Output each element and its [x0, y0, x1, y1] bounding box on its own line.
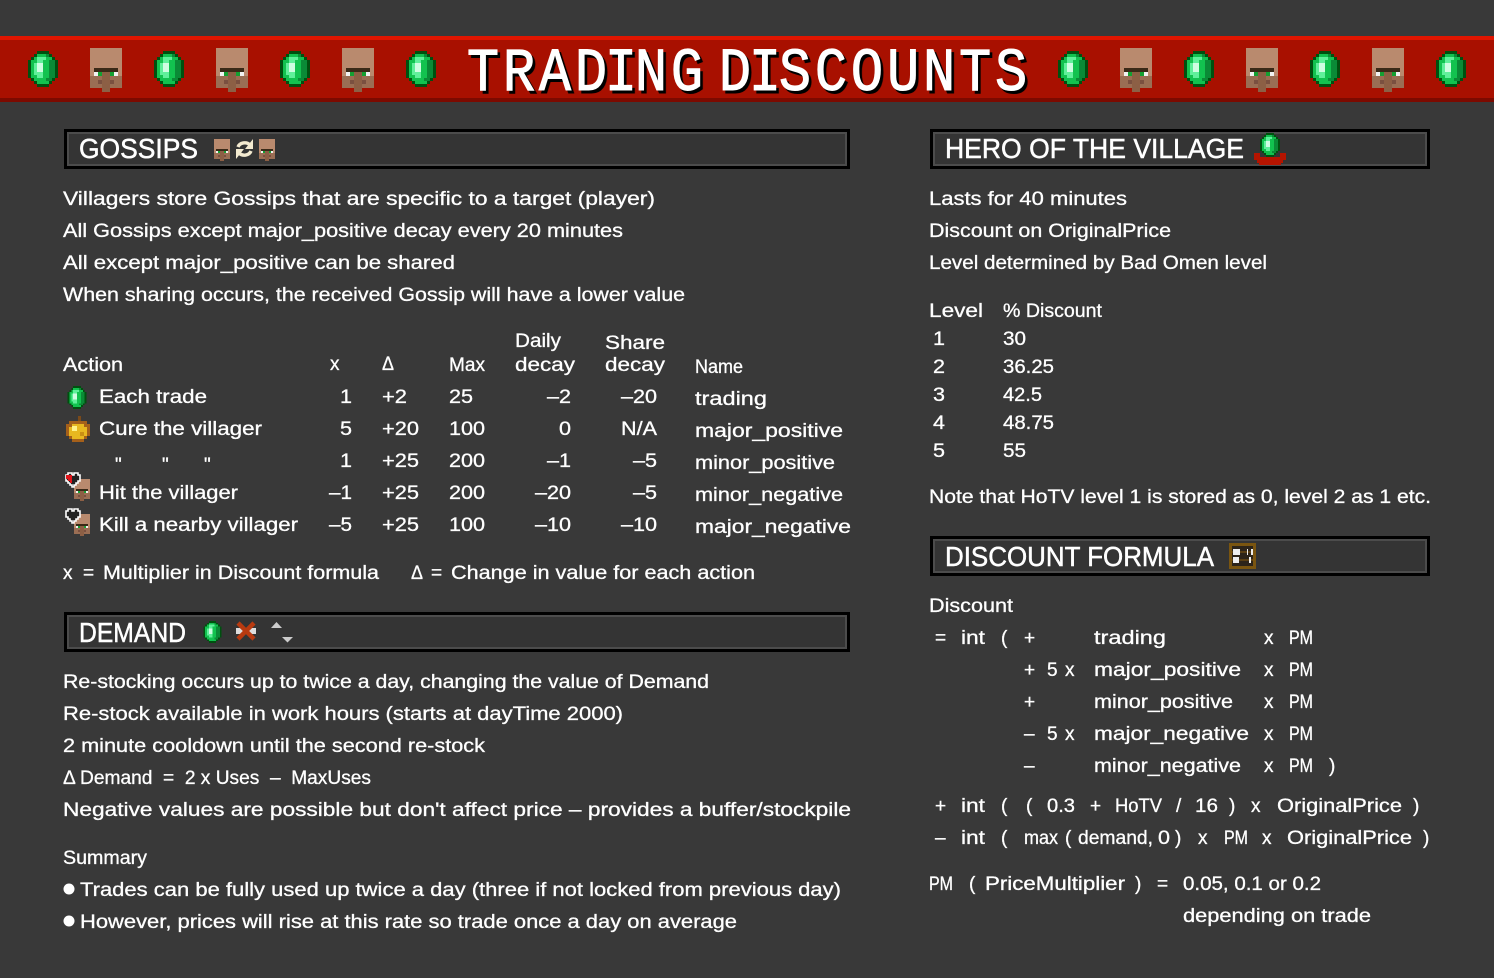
formula line 2: PM: [1289, 660, 1313, 681]
icon: emerald row left: [28, 51, 436, 87]
panel: hero of the village: [929, 129, 1431, 508]
panel: gossips: [63, 129, 851, 584]
icon: emerald row right: [1058, 51, 1466, 87]
formula line 7: PM: [1224, 828, 1248, 849]
formula line 7: –: [935, 828, 946, 849]
text block: demand notes: 2 minute cooldown until the second re-stock: [63, 736, 486, 757]
table header: x: [330, 354, 340, 375]
formula line 5: minor_negative: [1094, 756, 1241, 777]
formula line 6: x: [1251, 796, 1261, 817]
table: hero discount levels: 48.75: [1003, 413, 1054, 434]
formula line 5: –: [1024, 756, 1035, 777]
heading: discount formula: DISCOUNT FORMULA: [945, 541, 1214, 572]
title banner: [0, 36, 1494, 109]
formula line 7: x: [1262, 828, 1272, 849]
formula line 6: +: [935, 796, 946, 817]
formula line 4: major_negative: [1094, 724, 1249, 745]
table header: Δ: [382, 354, 394, 375]
formula: Discount: [929, 596, 1014, 617]
row: hit the villager: –20: [535, 483, 571, 504]
formula line 4: PM: [1289, 724, 1313, 745]
icon: empty heart and villager: [66, 509, 90, 536]
price multiplier note: depending on trade: [1183, 906, 1371, 927]
row: cure the villager: 5: [340, 419, 352, 440]
formula line 7: [935, 828, 1429, 849]
text block: gossip notes: Villagers store Gossips that are specific to a target (player): [63, 189, 655, 210]
formula line 6: (: [1026, 796, 1033, 817]
summary: Trades can be fully used up twice a day (three if not locked from previous day): [80, 880, 841, 901]
formula line 1: (: [1001, 628, 1008, 649]
icon: emerald: [67, 386, 87, 409]
icon: crossed arrow: [236, 623, 256, 639]
row: kill a nearby villager: major_negative: [695, 517, 851, 538]
row: ditto: –5: [633, 451, 657, 472]
row: cure the villager: Cure the villager: [99, 419, 263, 440]
formula line 5: x: [1264, 756, 1274, 777]
row: each trade: –20: [621, 387, 657, 408]
text block: gossip notes: When sharing occurs, the received Gossip will have a lower value: [63, 285, 685, 306]
formula line 2: x: [1065, 660, 1075, 681]
text block: hero notes: [929, 189, 1267, 274]
formula line 3: PM: [1289, 692, 1313, 713]
formula line 1: int: [961, 628, 986, 649]
row: ditto: 1: [340, 451, 352, 472]
price multiplier note: [929, 874, 1371, 927]
text block: demand notes: [63, 672, 851, 821]
text block: demand notes: Re-stocking occurs up to twice a day, changing the value of Demand: [63, 672, 709, 693]
table: hero discount levels: 36.25: [1003, 357, 1054, 378]
formula line 1: [935, 628, 1313, 649]
row: kill a nearby villager: [99, 515, 851, 538]
heading: demand: [64, 612, 850, 652]
formula line 2: x: [1264, 660, 1274, 681]
icon: villagers swapping gossip: [214, 139, 275, 161]
row: ditto: [115, 451, 835, 476]
table: hero discount levels: 42.5: [1003, 385, 1042, 406]
row: cure the villager: +20: [382, 419, 419, 440]
table: hero discount levels: [929, 301, 1103, 462]
legend: =: [83, 563, 94, 584]
icon: emerald: [203, 621, 222, 643]
icon: villager row right: [1120, 48, 1404, 92]
legend: =: [431, 563, 442, 584]
formula line 6: (: [1001, 796, 1008, 817]
row: kill a nearby villager: +25: [382, 515, 419, 536]
formula line 1: x: [1264, 628, 1274, 649]
formula line 2: +: [1024, 660, 1035, 681]
row: each trade: [99, 387, 767, 410]
formula line 7: demand,: [1078, 828, 1153, 849]
row: each trade: 1: [340, 387, 352, 408]
formula line 7: (: [1065, 828, 1072, 849]
icon: golden apple: [66, 416, 90, 442]
formula line 4: x: [1065, 724, 1075, 745]
row: cure the villager: major_positive: [695, 421, 843, 442]
text block: gossip notes: [63, 189, 685, 306]
row: each trade: trading: [695, 389, 767, 410]
formula line 7: int: [961, 828, 986, 849]
row: each trade: 25: [449, 387, 473, 408]
table: gossip actions: [63, 331, 851, 538]
table header: [63, 331, 743, 378]
table: hero discount levels: 1: [933, 329, 945, 350]
table header: Daily: [515, 331, 562, 352]
row: kill a nearby villager: 100: [449, 515, 485, 536]
formula line 1: PM: [1289, 628, 1313, 649]
table header: Action: [63, 355, 123, 376]
row: each trade: –2: [547, 387, 571, 408]
price multiplier note: (: [969, 874, 976, 895]
table: hero discount levels: 30: [1003, 329, 1026, 350]
row: kill a nearby villager: Kill a nearby villager: [99, 515, 299, 536]
formula line 4: 5: [1047, 724, 1058, 745]
text block: demand notes: Re-stock available in work hours (starts at dayTime 2000): [63, 704, 623, 725]
formula line 4: [1024, 724, 1313, 745]
summary: [63, 848, 841, 933]
row: hit the villager: minor_negative: [695, 485, 843, 506]
row: kill a nearby villager: –10: [621, 515, 657, 536]
table: hero discount levels: % Discount: [1003, 301, 1103, 322]
formula line 3: [1024, 692, 1313, 713]
row: cure the villager: 100: [449, 419, 485, 440]
row: hit the villager: –1: [329, 483, 352, 504]
formula line 6: /: [1176, 796, 1182, 817]
icon: half heart and villager: [66, 473, 90, 501]
formula line 1: trading: [1094, 628, 1166, 649]
table: hero discount levels: 5: [933, 441, 945, 462]
icon: hero emerald with ribbon: [1254, 133, 1286, 165]
text block: hero notes: Discount on OriginalPrice: [929, 221, 1171, 242]
price multiplier note: PM: [929, 874, 953, 895]
heading: gossips: GOSSIPS: [79, 133, 198, 164]
row: hit the villager: Hit the villager: [99, 483, 239, 504]
row: ditto: minor_positive: [695, 453, 835, 474]
panel: demand: [63, 612, 851, 933]
formula line 1: =: [935, 628, 946, 649]
table header: Max: [449, 355, 485, 376]
formula line 6: ): [1229, 796, 1235, 817]
icon: abacus: [1229, 543, 1256, 569]
formula line 6: 16: [1195, 796, 1218, 817]
table header: decay: [605, 355, 666, 376]
formula line 6: +: [1090, 796, 1101, 817]
formula line 5: PM: [1289, 756, 1313, 777]
formula line 2: major_positive: [1094, 660, 1241, 681]
formula line 7: ): [1423, 828, 1429, 849]
row: each trade: +2: [382, 387, 407, 408]
summary: Summary: [63, 848, 148, 869]
row: hit the villager: –5: [633, 483, 657, 504]
legend: [63, 563, 755, 584]
formula line 7: x: [1198, 828, 1208, 849]
text block: demand notes: Negative values are possible but don't affect price – provides a buffer/stockpile: [63, 800, 851, 821]
row: cure the villager: [99, 419, 843, 442]
title: TRADING DISCOUNTS: [467, 40, 1027, 109]
row: hit the villager: +25: [382, 483, 419, 504]
formula line 6: ): [1413, 796, 1419, 817]
row: kill a nearby villager: –10: [535, 515, 571, 536]
price multiplier note: ): [1135, 874, 1141, 895]
formula line 2: 5: [1047, 660, 1058, 681]
summary: However, prices will rise at this rate so trade once a day on average: [80, 912, 737, 933]
formula line 5: [1024, 756, 1335, 777]
formula line 6: [935, 796, 1419, 817]
table: hero discount levels: 55: [1003, 441, 1026, 462]
formula line 6: 0.3: [1047, 796, 1075, 817]
legend: Multiplier in Discount formula: [103, 563, 379, 584]
price multiplier note: PriceMultiplier: [985, 874, 1126, 895]
heading: demand: DEMAND: [79, 617, 186, 648]
formula line 7: 0: [1158, 828, 1170, 849]
formula line 7: max: [1024, 828, 1058, 849]
formula line 4: x: [1264, 724, 1274, 745]
formula line 2: [1024, 660, 1313, 681]
formula line 3: minor_positive: [1094, 692, 1233, 713]
table header: decay: [515, 355, 576, 376]
price multiplier note: =: [1157, 874, 1168, 895]
table header: Name: [695, 357, 743, 378]
text block: hero notes: Lasts for 40 minutes: [929, 189, 1127, 210]
legend: x: [63, 563, 73, 584]
icon: villager row left: [90, 48, 374, 92]
legend: Change in value for each action: [451, 563, 755, 584]
row: ditto: 200: [449, 451, 485, 472]
row: ditto: ": [162, 455, 169, 476]
heading: hero of the village: [930, 129, 1430, 169]
formula line 1: +: [1024, 628, 1035, 649]
table header: Share: [605, 333, 665, 354]
text block: demand notes: Δ Demand = 2 x Uses – MaxUses: [63, 768, 371, 789]
heading: gossips: [64, 129, 850, 169]
formula line 7: ): [1175, 828, 1181, 849]
formula line 6: OriginalPrice: [1277, 796, 1402, 817]
row: kill a nearby villager: –5: [329, 515, 352, 536]
heading: hero of the village: HERO OF THE VILLAGE: [945, 133, 1244, 164]
row: ditto: +25: [382, 451, 419, 472]
note: hotv level storage: Note that HoTV level 1 is stored as 0, level 2 as 1 etc.: [929, 487, 1431, 508]
icon: up and down arrows: [271, 622, 293, 642]
formula line 5: ): [1329, 756, 1335, 777]
text block: gossip notes: All Gossips except major_positive decay every 20 minutes: [63, 221, 623, 242]
row: cure the villager: N/A: [621, 419, 657, 440]
table: hero discount levels: Level: [929, 301, 983, 322]
table: hero discount levels: 2: [933, 357, 945, 378]
row: hit the villager: 200: [449, 483, 485, 504]
formula line 3: x: [1264, 692, 1274, 713]
formula line 6: int: [961, 796, 986, 817]
row: cure the villager: 0: [559, 419, 571, 440]
formula: [929, 596, 1429, 927]
row: ditto: ": [115, 455, 122, 476]
formula line 6: HoTV: [1115, 796, 1162, 817]
table: hero discount levels: 3: [933, 385, 945, 406]
row: each trade: Each trade: [99, 387, 207, 408]
formula line 7: OriginalPrice: [1287, 828, 1412, 849]
row: ditto: –1: [547, 451, 571, 472]
row: ditto: ": [204, 455, 211, 476]
price multiplier note: 0.05, 0.1 or 0.2: [1183, 874, 1321, 895]
text block: gossip notes: All except major_positive can be shared: [63, 253, 455, 274]
row: hit the villager: [99, 483, 843, 506]
formula line 7: (: [1001, 828, 1008, 849]
legend: Δ: [411, 563, 423, 584]
formula line 4: –: [1024, 724, 1035, 745]
formula line 3: +: [1024, 692, 1035, 713]
table: hero discount levels: 4: [933, 413, 945, 434]
heading: discount formula: [930, 536, 1430, 576]
text block: hero notes: Level determined by Bad Omen level: [929, 253, 1267, 274]
panel: discount formula: [929, 536, 1430, 927]
